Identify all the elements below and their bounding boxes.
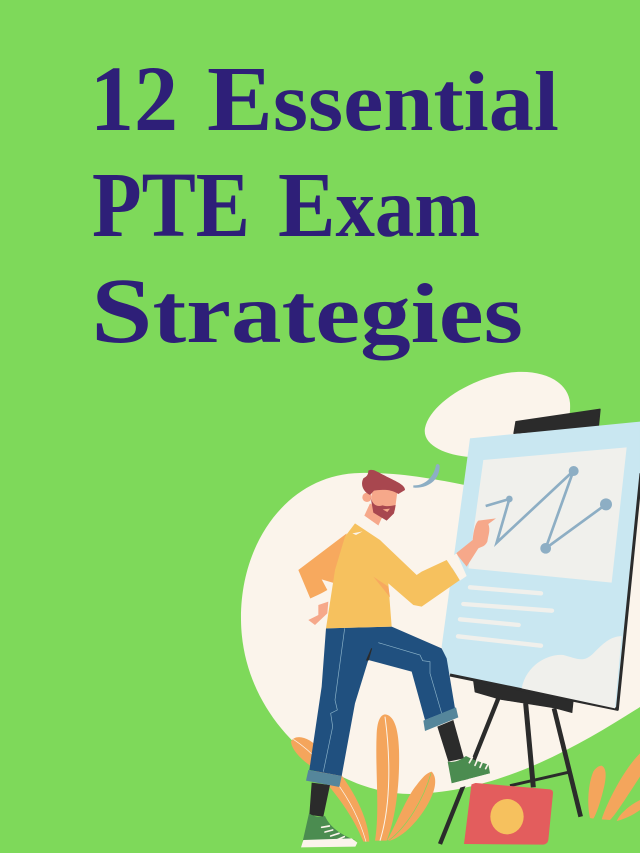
sweater fold: [373, 577, 390, 597]
title: Essential: [207, 48, 559, 151]
front cuff: [447, 553, 467, 581]
line chart: [486, 466, 612, 554]
back cuff: [308, 591, 330, 607]
beard: [371, 497, 396, 521]
cloud on board: [522, 636, 622, 708]
left sole: [301, 838, 357, 847]
person: [298, 470, 505, 847]
back arm: [298, 533, 347, 599]
pointing hand: [456, 518, 496, 567]
swoosh: [413, 464, 440, 488]
board clip: [514, 409, 600, 433]
leaves: right plant: [588, 753, 640, 821]
blob: small cream shape: [425, 372, 570, 457]
title: PTE: [92, 154, 250, 257]
presentation board: [442, 422, 640, 709]
back hand: [308, 602, 328, 625]
board sheet: [442, 422, 640, 709]
red folder: [464, 783, 553, 845]
text lines on board: [458, 587, 552, 646]
right sole: [452, 764, 505, 789]
chart panel: [468, 447, 627, 583]
trousers: [309, 627, 455, 776]
title: [90, 48, 559, 363]
title: Strategies: [91, 260, 523, 363]
sweater: [326, 523, 460, 628]
trouser seams: [323, 628, 442, 772]
head: [362, 493, 372, 502]
cuffs: [306, 707, 458, 787]
collar: [356, 516, 380, 540]
leaves: left plant: [291, 714, 435, 842]
board edge: [450, 473, 640, 709]
neck: [364, 503, 384, 526]
socks: [309, 720, 464, 817]
title: Exam: [278, 154, 480, 257]
laces: [322, 757, 488, 840]
left shoe: [303, 813, 355, 841]
hair: [362, 470, 405, 495]
upper body: [298, 470, 496, 628]
easel: legs and shelf: [440, 680, 581, 844]
title: 12: [90, 48, 178, 151]
legs and shoes: [301, 627, 505, 847]
right shoe: [448, 756, 491, 783]
blob: large cream shape: [241, 470, 640, 794]
sweater highlight: [352, 531, 363, 535]
yellow circle: [490, 799, 524, 834]
